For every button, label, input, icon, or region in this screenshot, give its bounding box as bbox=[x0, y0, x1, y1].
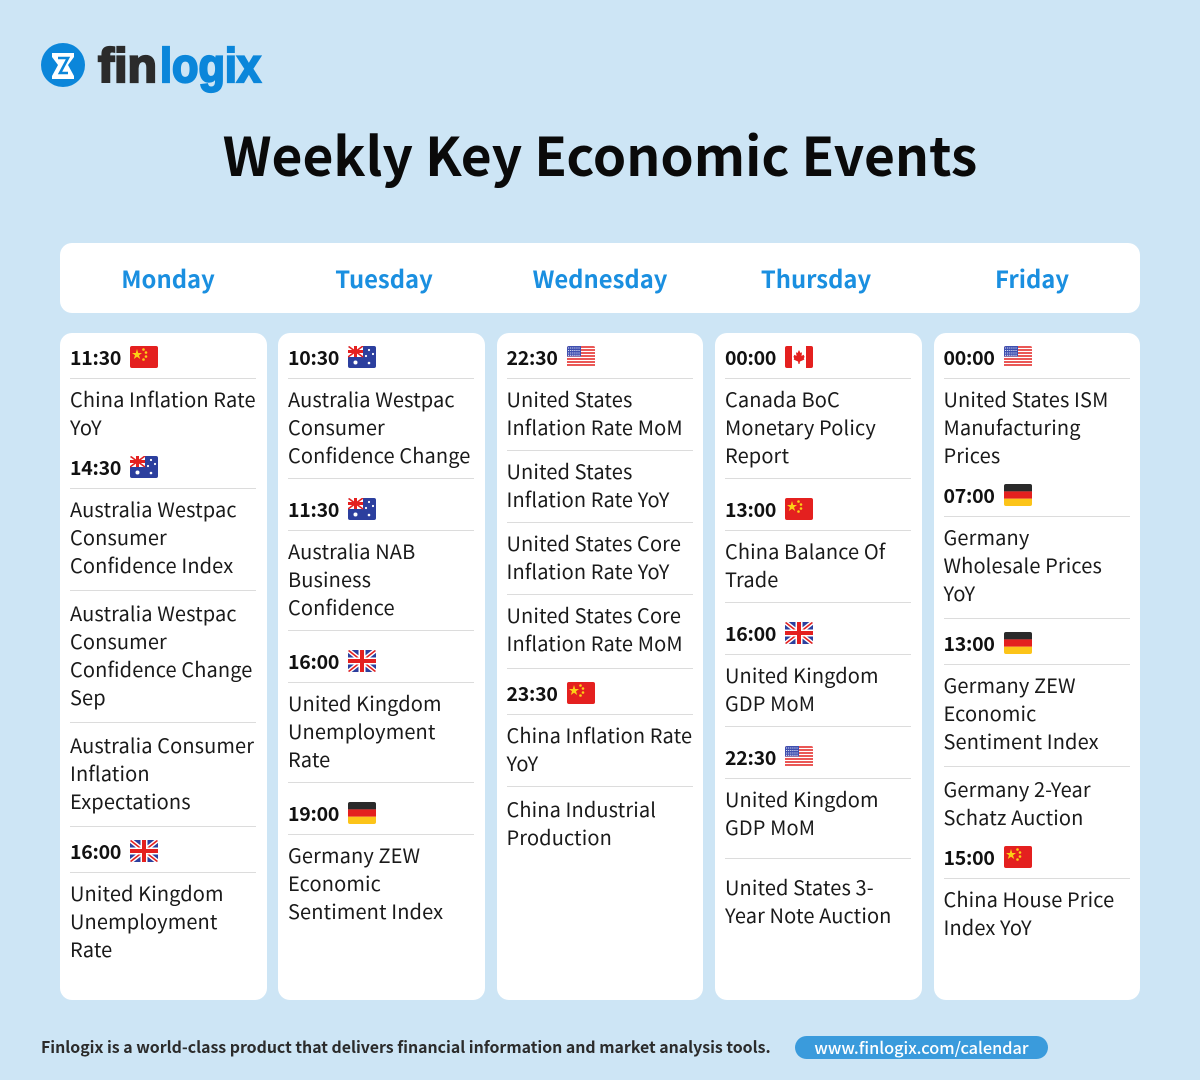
event: Inflation Rate MoM bbox=[506, 628, 683, 657]
event: United States bbox=[506, 456, 632, 485]
event: Germany bbox=[944, 522, 1029, 551]
event: YoY bbox=[944, 578, 975, 607]
event: GDP MoM bbox=[725, 688, 815, 717]
event bbox=[288, 840, 443, 925]
panel: Tuesday events bbox=[278, 333, 484, 1000]
event: Index YoY bbox=[944, 912, 1032, 941]
event: Production bbox=[506, 822, 612, 851]
time: 14:30 Australia: 14:30 bbox=[70, 452, 121, 481]
time: 16:00 United Kingdom bbox=[288, 646, 376, 675]
event: Sentiment Index bbox=[944, 726, 1099, 755]
event: Germany ZEW bbox=[944, 670, 1076, 699]
event bbox=[70, 494, 237, 579]
event: Australia Westpac bbox=[70, 494, 237, 523]
time: 13:00 China: 13:00 bbox=[725, 494, 776, 523]
event bbox=[506, 384, 683, 441]
time: 16:00 United Kingdom: 16:00 bbox=[725, 618, 776, 647]
event bbox=[944, 775, 1134, 831]
event: Australia Westpac bbox=[70, 598, 237, 627]
event bbox=[506, 456, 670, 513]
event bbox=[70, 878, 224, 963]
event: Inflation Rate YoY bbox=[506, 484, 669, 513]
event bbox=[725, 660, 879, 717]
event bbox=[725, 872, 892, 929]
event: Confidence Change bbox=[288, 440, 470, 469]
event bbox=[70, 598, 252, 711]
heading: Wednesday: Wednesday bbox=[533, 260, 667, 295]
time: 10:30 Australia: 10:30 bbox=[288, 342, 339, 371]
event: Australia Consumer bbox=[70, 730, 254, 759]
event: United Kingdom bbox=[70, 878, 224, 907]
event: Inflation bbox=[70, 758, 150, 787]
event: China Industrial bbox=[506, 794, 656, 823]
time: 11:30 Australia bbox=[288, 494, 376, 523]
event: Canada BoC bbox=[725, 384, 840, 413]
panel: weekday header bbox=[60, 243, 1140, 313]
event bbox=[725, 784, 879, 841]
time: 19:00 Germany bbox=[288, 798, 376, 827]
time: 00:00 United States bbox=[944, 342, 1032, 371]
heading: Friday: Friday bbox=[995, 260, 1069, 295]
event: United States bbox=[506, 384, 632, 413]
time: 14:30 Australia bbox=[70, 452, 158, 481]
time: 07:00 Germany bbox=[944, 480, 1032, 509]
event bbox=[725, 536, 886, 593]
panel: Thursday events bbox=[715, 333, 922, 1000]
time: 13:00 China bbox=[725, 494, 813, 523]
wordmark: fin bbox=[98, 40, 157, 93]
event: Unemployment bbox=[70, 906, 218, 935]
event: China Inflation Rate bbox=[506, 720, 692, 749]
event bbox=[944, 885, 1134, 941]
event: United States Core bbox=[506, 600, 681, 629]
event bbox=[288, 688, 442, 773]
time: 13:00 Germany: 13:00 bbox=[944, 628, 995, 657]
wordmark bbox=[98, 40, 261, 93]
event: United Kingdom bbox=[288, 688, 442, 717]
event: Year Note Auction bbox=[725, 900, 892, 929]
event: Business bbox=[288, 564, 371, 593]
event bbox=[70, 730, 254, 815]
event: Inflation Rate MoM bbox=[506, 412, 683, 441]
event: Wholesale Prices bbox=[944, 550, 1102, 579]
event: Expectations bbox=[70, 786, 191, 815]
event bbox=[70, 384, 256, 441]
event: United States Core bbox=[506, 528, 681, 557]
event: Report bbox=[725, 440, 789, 469]
event bbox=[506, 720, 692, 777]
event bbox=[506, 528, 681, 585]
event: Economic bbox=[288, 868, 381, 897]
event: United Kingdom bbox=[725, 660, 879, 689]
panel: Friday events bbox=[934, 333, 1140, 1000]
event: Consumer bbox=[288, 412, 385, 441]
event bbox=[725, 384, 876, 469]
heading: Monday: Monday bbox=[121, 260, 215, 295]
time: 22:30 United States: 22:30 bbox=[506, 342, 558, 371]
event: Sep bbox=[70, 682, 106, 711]
time: 07:00 Germany: 07:00 bbox=[944, 480, 995, 509]
logo: finlogix bbox=[41, 40, 262, 94]
event bbox=[506, 794, 656, 851]
event: Economic bbox=[944, 698, 1036, 727]
time: 00:00 Canada: 00:00 bbox=[725, 342, 776, 371]
heading: Tuesday: Tuesday bbox=[335, 260, 433, 295]
event bbox=[944, 522, 1102, 607]
event: United States 3- bbox=[725, 872, 874, 901]
time: 16:00 United Kingdom bbox=[70, 836, 158, 865]
event bbox=[288, 384, 470, 469]
time: 11:30 Australia: 11:30 bbox=[288, 494, 339, 523]
event: Consumer bbox=[70, 522, 167, 551]
event: Unemployment bbox=[288, 716, 436, 745]
event bbox=[944, 670, 1099, 755]
panel: Wednesday events bbox=[496, 333, 703, 1000]
heading: Thursday: Thursday bbox=[761, 260, 871, 295]
panel: Monday events bbox=[60, 333, 266, 1000]
event bbox=[288, 536, 415, 621]
event: Australia Westpac bbox=[288, 384, 455, 413]
time: 22:30 United States bbox=[506, 342, 595, 371]
event: Germany ZEW bbox=[288, 840, 420, 869]
time: 19:00 Germany: 19:00 bbox=[288, 798, 339, 827]
time: 13:00 Germany bbox=[944, 628, 1032, 657]
event: Rate bbox=[70, 934, 112, 963]
time: 23:30 China bbox=[506, 678, 595, 707]
event: Confidence Index bbox=[70, 550, 233, 579]
event: Australia NAB bbox=[288, 536, 415, 565]
event: YoY bbox=[70, 412, 102, 441]
time: 11:30 China bbox=[70, 342, 158, 371]
event: Sentiment Index bbox=[288, 896, 443, 925]
event: United Kingdom bbox=[725, 784, 879, 813]
event: Trade bbox=[725, 564, 778, 593]
event: Manufacturing bbox=[944, 412, 1081, 441]
event: United States ISM bbox=[944, 384, 1108, 413]
time: 00:00 Canada bbox=[725, 342, 813, 371]
time: 16:00 United Kingdom: 16:00 bbox=[288, 646, 339, 675]
event bbox=[506, 600, 683, 657]
time: 10:30 Australia bbox=[288, 342, 376, 371]
time: 22:30 United States bbox=[725, 742, 813, 771]
event: Prices bbox=[944, 440, 1000, 469]
title: Weekly Key Economic Events bbox=[223, 115, 977, 192]
footer link pill: www.finlogix.com/calendar bbox=[814, 1035, 1029, 1059]
time: 23:30 China: 23:30 bbox=[506, 678, 558, 707]
time: 15:00 China bbox=[944, 843, 1042, 871]
event: Germany 2-Year bbox=[944, 774, 1091, 803]
event: China Balance Of bbox=[725, 536, 885, 565]
event: Monetary Policy bbox=[725, 412, 876, 441]
event: YoY bbox=[506, 748, 538, 777]
time: 11:30 China: 11:30 bbox=[70, 342, 121, 371]
time: 16:00 United Kingdom: 16:00 bbox=[70, 836, 121, 865]
event: Consumer bbox=[70, 626, 167, 655]
footer text: Finlogix is a world-class product that delivers financial information and market analysis tools. bbox=[41, 1035, 771, 1058]
event: Confidence Change bbox=[70, 654, 252, 683]
event: China Inflation Rate bbox=[70, 384, 256, 413]
event: Rate bbox=[288, 744, 330, 773]
time: 22:30 United States: 22:30 bbox=[725, 742, 776, 771]
time: 16:00 United Kingdom bbox=[725, 618, 813, 647]
event: GDP MoM bbox=[725, 812, 815, 841]
event: Confidence bbox=[288, 592, 395, 621]
time: 00:00 United States: 00:00 bbox=[944, 342, 995, 371]
icon: logo mark bbox=[41, 43, 85, 87]
time: 15:00 China: 15:00 bbox=[944, 842, 995, 871]
event: Schatz Auction bbox=[944, 802, 1083, 831]
event: Inflation Rate YoY bbox=[506, 556, 669, 585]
event: China House Price bbox=[944, 884, 1114, 913]
event bbox=[944, 384, 1108, 469]
